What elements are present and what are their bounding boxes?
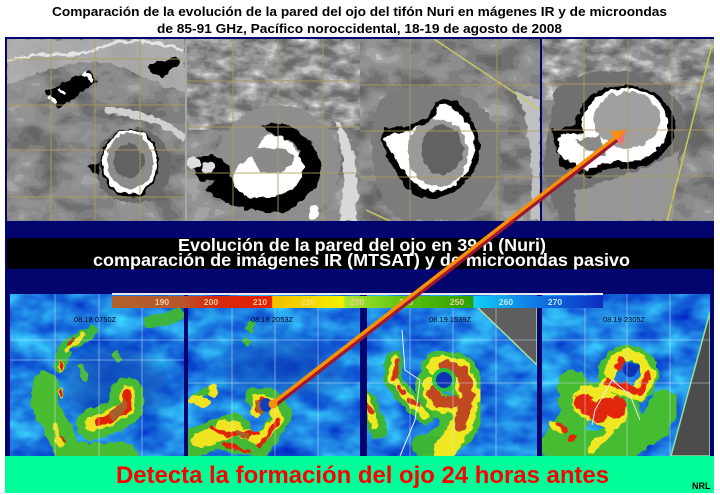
title: Comparación de la evolución de la pared del ojo del tifón Nuri en mágenes IR y de microondas [52,4,667,19]
color scale bar: 250 [450,297,464,307]
color scale bar: 190 [155,297,169,307]
panel: IR image 4 [542,39,714,221]
panel: microwave image 1 [10,294,184,456]
timestamps: 08.19 1539Z [429,315,472,324]
heading band [7,235,714,270]
timestamps: 08.19 2305Z [603,315,646,324]
eyewall ring [86,128,171,204]
color scale bar: 270 [548,297,562,307]
heading band: Evolución de la pared del ojo en 39 h (Nuri) [178,235,546,255]
panel: IR image 2 [187,39,360,225]
color scale bar: 220 [301,297,315,307]
bottom callout bar: Detecta la formación del ojo 24 horas antes [116,462,609,489]
coastline [400,330,420,456]
gray swath corner [474,304,537,365]
white grid lines on microwave images [10,294,710,456]
color scale bar [112,293,603,308]
bottom callout bar [5,456,714,493]
panel: microwave image 2 [188,294,360,456]
title: de 85-91 GHz, Pacífico noroccidental, 18-19 de agosto de 2008 [157,21,562,36]
bottom callout bar: NRL [692,481,711,491]
timestamps [74,315,646,324]
gray swath corner [671,312,710,456]
color scale bar: 210 [253,297,267,307]
panel: microwave image 4 [542,294,710,456]
color scale bar: 200 [204,297,218,307]
panel: IR image 1 [7,39,185,221]
grid lines [7,39,714,221]
color scale bar: 240 [399,297,413,307]
arrow [268,130,626,408]
heading band: comparación de imágenes IR (MTSAT) y de microondas pasivo [93,250,630,270]
coastline [667,45,712,221]
color scale bar: 260 [499,297,513,307]
timestamps: 08.18 2053Z [251,315,294,324]
cloud band black and white [44,57,180,108]
coastline [434,39,540,110]
color scale bar: 230 [350,297,364,307]
panel: IR image 3 [360,39,540,221]
panel: microwave image 3 [367,294,537,456]
coastline [592,380,640,425]
title [52,4,667,36]
image seam [185,39,187,221]
timestamps: 08.18 0750Z [74,315,117,324]
